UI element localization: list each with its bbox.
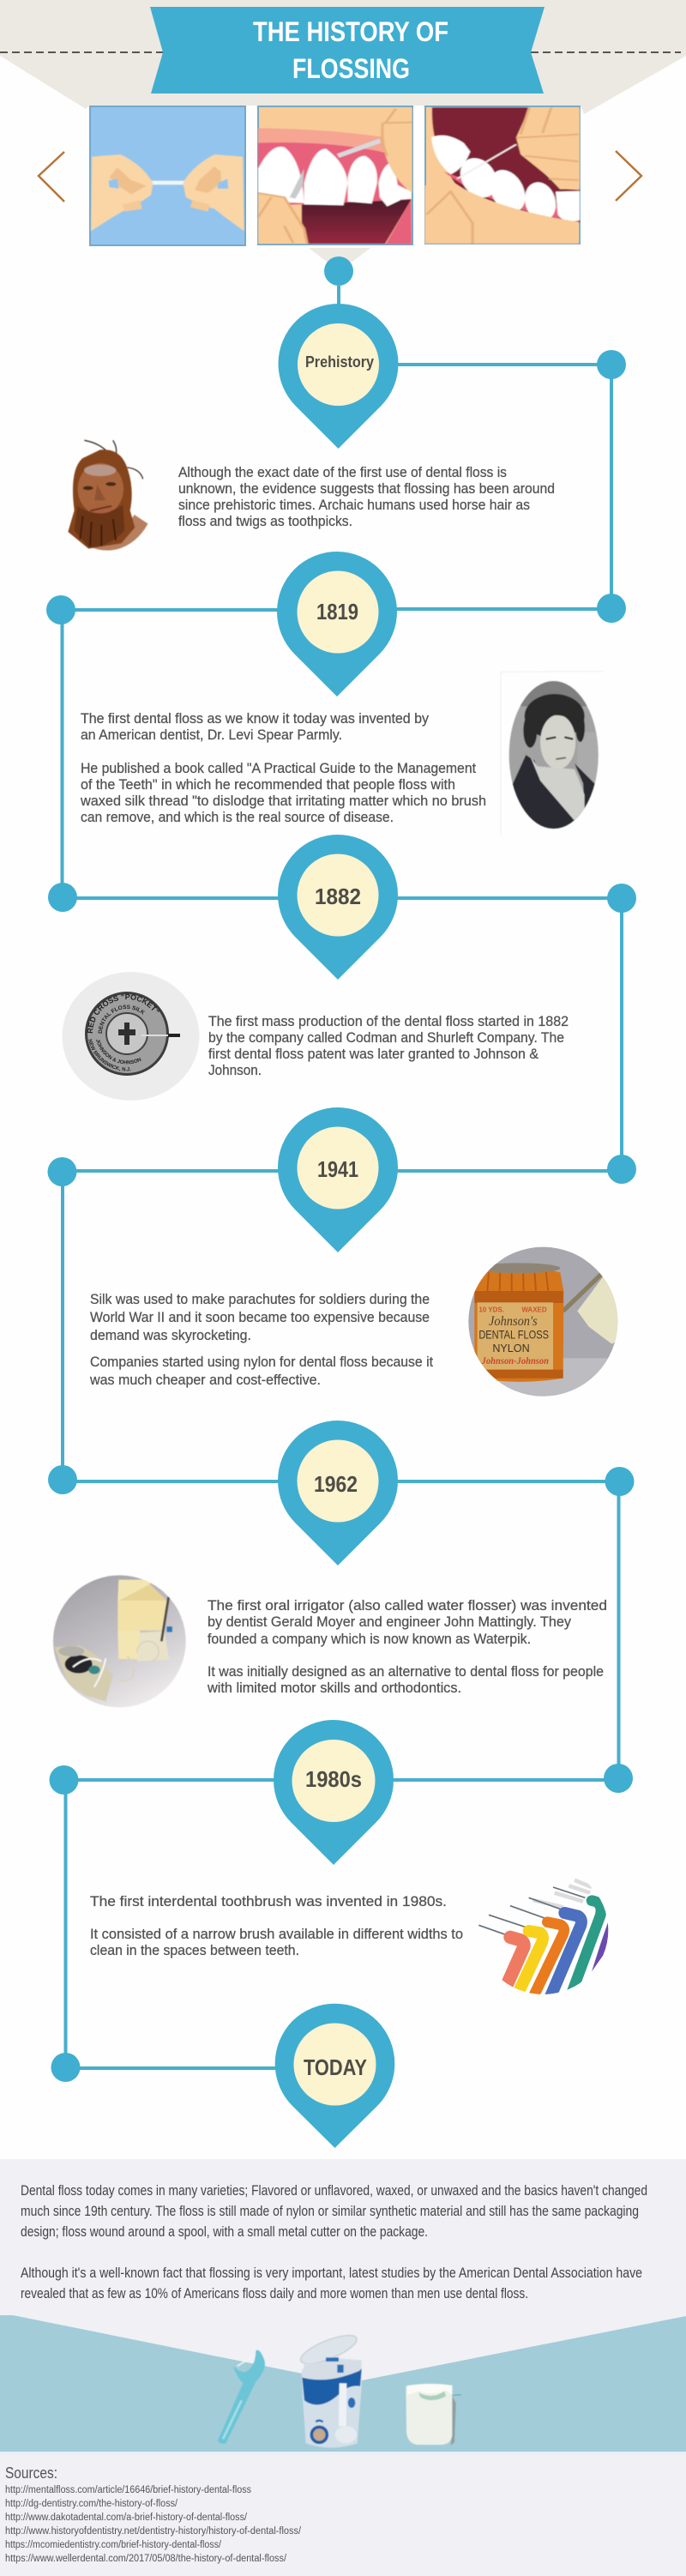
photo: Red Cross floss spool (62, 972, 199, 1101)
text: 1819: The first dental floss as we know it today was invented by (81, 711, 430, 727)
title banner: THE HISTORY OF (253, 16, 448, 47)
photo: Red Cross floss spool: RED CROSS "POCKET" (87, 994, 159, 1033)
pin: 1941: 1941 (317, 1156, 358, 1182)
text: 1941: was much cheaper and cost-effective. (89, 1372, 321, 1388)
photo: Johnson's dental floss jar: DENTAL FLOSS (478, 1328, 549, 1342)
text: 1941: World War II and it soon became too expensive because (90, 1310, 430, 1325)
text: 1882 (208, 1014, 569, 1078)
photo: Red Cross floss spool: NEW BRUNSWICK, N.J. (88, 1039, 130, 1071)
sources list: https://mcomiedentistry.com/brief-history-dental-floss/ (5, 2540, 222, 2550)
pin: 1819 (277, 552, 397, 697)
sources list: http://www.historyofdentistry.net/dentistry-history/history-of-dental-floss/ (5, 2526, 302, 2537)
text: today summary: design; floss wound around a spool, with a small metal cutter on the package. (21, 2224, 428, 2240)
photo: Johnson's dental floss jar: Johnson's (489, 1314, 538, 1329)
title banner (150, 7, 545, 94)
connector: 1941 to 1962 (48, 1157, 283, 1494)
text: 1941 (89, 1292, 433, 1388)
text: 1819: waxed silk thread "to dislodge that irritating matter which no brush (80, 793, 486, 809)
pin: 1882 (278, 835, 398, 980)
connector: 1980s to today (50, 1765, 283, 2082)
text: prehistory: floss and twigs as toothpicks. (178, 514, 352, 529)
pin: 1962 (278, 1421, 398, 1566)
sources list: http://dg-dentistry.com/the-history-of-floss/ (5, 2499, 178, 2509)
icon: floss pick (218, 2350, 265, 2444)
connector: prehistory to 1819 (394, 350, 626, 623)
text: 1962: It was initially designed as an alternative to dental floss for people (208, 1664, 604, 1680)
text: 1882: The first mass production of the dental floss started in 1882 (208, 1014, 569, 1029)
text: 1819 (80, 711, 486, 825)
pin: TODAY: TODAY (304, 2054, 367, 2080)
text: today summary (21, 2183, 647, 2302)
sources list: https://www.wellerdental.com/2017/05/08/the-history-of-dental-floss/ (5, 2554, 287, 2564)
text: 1941: Silk was used to make parachutes for soldiers during the (90, 1292, 430, 1307)
photo: interdental brushes (478, 1880, 609, 1997)
illustration: hands holding floss (90, 106, 245, 245)
connector: 1819 to 1882 (46, 595, 283, 912)
pin: 1980s (274, 1720, 394, 1865)
text: 1980s: It consisted of a narrow brush available in different widths to (90, 1927, 463, 1942)
dashed stitching line (0, 51, 681, 53)
photo: Red Cross floss spool: JOHNSON & JOHNSON (96, 1040, 141, 1064)
text: prehistory (178, 465, 555, 529)
pin: Prehistory (278, 304, 398, 449)
text: 1962: founded a company which is now known as Waterpik. (208, 1632, 531, 1647)
text: 1819: can remove, and which is the real source of disease. (81, 810, 394, 825)
connector: 1962 to 1980s (390, 1467, 635, 1793)
icon: floss box (406, 2384, 461, 2446)
divider strip (0, 2452, 686, 2455)
text: 1882: first dental floss patent was later granted to Johnson & (208, 1047, 539, 1062)
photo: Red Cross floss spool: DENTAL FLOSS SILK (98, 1005, 146, 1034)
icon: water flosser (298, 2330, 362, 2447)
text: 1819: an American dentist, Dr. Levi Spear Parmly. (81, 727, 342, 743)
icon: left chevron (39, 152, 64, 202)
text: prehistory: since prehistoric times. Archaic humans used horse hair as (178, 498, 530, 513)
text: prehistory: unknown, the evidence suggests that flossing has been around (178, 481, 555, 497)
title banner: FLOSSING (292, 53, 410, 84)
text: 1962: by dentist Gerald Moyer and engineer John Mattingly. They (208, 1614, 572, 1630)
funnel under images (309, 248, 370, 262)
pin: 1980s: 1980s (305, 1766, 362, 1792)
text: 1882: by the company called Codman and Shurleft Company. The (208, 1030, 564, 1046)
illustration: flossing front teeth (258, 106, 412, 244)
text: 1962: with limited motor skills and orthodontics. (207, 1680, 461, 1696)
timeline start node (324, 256, 353, 305)
text: 1882: Johnson. (208, 1063, 262, 1078)
teal product band (0, 2315, 686, 2452)
text: 1819: He published a book called "A Practical Guide to the Management (81, 761, 476, 776)
text: 1980s (90, 1894, 463, 1958)
text: 1980s: clean in the spaces between teeth. (90, 1943, 299, 1958)
text: 1962: The first oral irrigator (also called water flosser) was invented (208, 1598, 607, 1614)
header backdrop (0, 0, 686, 114)
photo: Johnson's dental floss jar: NYLON (492, 1342, 530, 1354)
photo: Johnson's dental floss jar: Johnson-Johnson (481, 1356, 549, 1366)
pin: 1941 (278, 1107, 398, 1252)
photo: first oral irrigator (53, 1575, 186, 1707)
photo: Dr. Levi Spear Parmly portrait (501, 672, 603, 835)
pin: 1882: 1882 (315, 884, 361, 909)
sources list: http://www.dakotadental.com/a-brief-history-of-dental-floss/ (5, 2513, 248, 2523)
sources list: http://mentalfloss.com/article/16646/brief-history-dental-floss (5, 2485, 251, 2495)
photo: Johnson's dental floss jar (463, 1244, 623, 1398)
text: 1941: demand was skyrocketing. (90, 1328, 251, 1343)
sources heading: Sources: (5, 2464, 57, 2482)
text: 1980s: The first interdental toothbrush was invented in 1980s. (90, 1894, 447, 1909)
text: 1941: Companies started using nylon for dental floss because it (90, 1354, 433, 1370)
pin: 1962: 1962 (314, 1471, 358, 1497)
icon: right chevron (616, 151, 641, 201)
text: 1962 (207, 1598, 607, 1696)
sources list (5, 2485, 302, 2564)
pin: TODAY (275, 2004, 394, 2148)
text: prehistory: Although the exact date of the first use of dental floss is (178, 465, 507, 480)
panel: today background (0, 2159, 686, 2576)
pin: 1819: 1819 (316, 599, 358, 624)
photo: Johnson's dental floss jar: 10 YDS. (478, 1306, 504, 1313)
text: today summary: revealed that as few as 10% of Americans floss daily and more women than men use dental floss. (21, 2286, 528, 2302)
pin: Prehistory: Prehistory (305, 353, 374, 371)
photo: Johnson's dental floss jar: WAXED (521, 1306, 547, 1313)
illustration: flossing side teeth (424, 106, 580, 244)
text: 1819: of the Teeth" in which he recommended that people floss with (81, 777, 455, 793)
connector: 1882 to 1941 (394, 884, 636, 1184)
photo: caveman (67, 439, 148, 551)
